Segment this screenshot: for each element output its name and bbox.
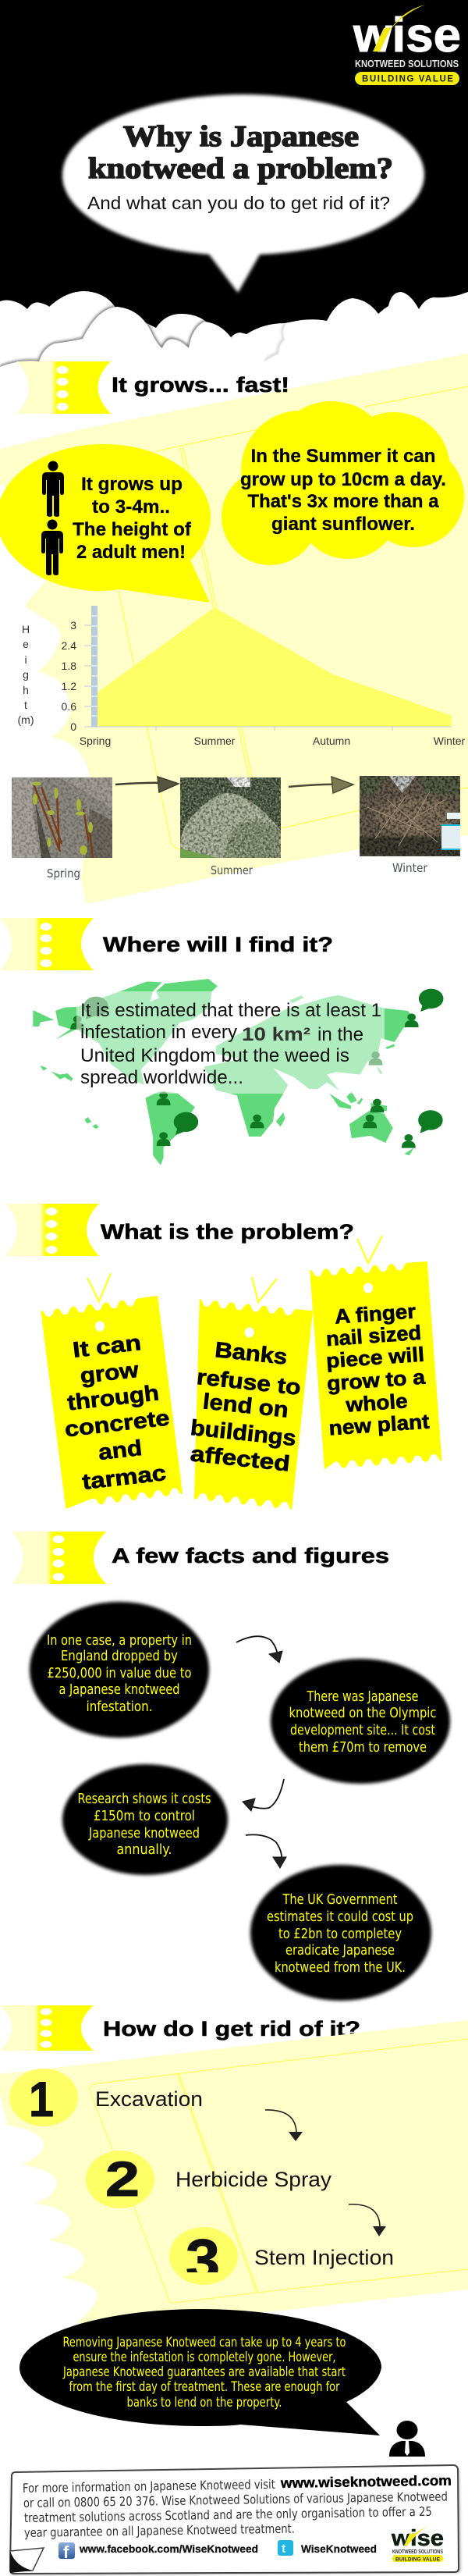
fact: property value: infestation. [86,1699,153,1715]
arrow: fact three to four [246,1834,286,1868]
fact: property value: England dropped by [61,1649,178,1664]
fact: olympic site: knotweed on the Olympic [289,1706,437,1721]
step 2: herbicide spray [86,2151,332,2208]
title: knotweed a problem? [88,152,393,185]
callout: guarantees speech bubble: banks to lend on the property. [126,2395,282,2410]
folded corner [10,2548,44,2573]
tag: grows through concrete: grow [79,1357,140,1388]
fact: government estimate: to £2bn to completey [278,1927,402,1942]
step 3: stem injection: 3 [186,2227,220,2293]
chart: height through the seasons: 3 [70,619,76,632]
tag: finger nail sized piece [310,1236,441,1469]
icon: twitter: t [282,2542,286,2556]
callout: guarantees speech bubble: Japanese Knotweed guarantees are available that start [62,2364,346,2379]
axis title: Height (m): i [24,653,27,666]
callout: guarantees speech bubble: from the first day of treatment. These are enough for [69,2379,340,2394]
tag: banks refuse: buildings [190,1415,297,1450]
chart: height through the seasons: Winter [434,735,466,747]
callout: height bubble [0,444,211,603]
logo: wise knotweed solutions [353,5,461,85]
tag: grows through concrete: It can [72,1330,143,1362]
photo captions [47,861,428,881]
arrow: spring to summer [115,777,179,792]
world map [33,979,443,1165]
step 1: excavation [9,2069,203,2127]
logo: wise knotweed solutions: BUILDING VALUE [362,75,453,84]
footer logo [391,2523,444,2562]
callout: summer growth cloud: giant sunflower. [271,514,415,535]
pale yellow panel: removal steps [0,2020,468,2324]
tag: grows through concrete: and [97,1436,144,1464]
icon: businessman [389,2421,425,2457]
chart: height through the seasons: 0 [70,720,76,733]
pale yellow panel: growth [0,354,468,904]
facebook address: www.facebook.com/WiseKnotweed [79,2542,258,2555]
chart: height through the seasons: Spring [80,735,111,747]
step 1: excavation: Excavation [95,2087,203,2111]
fact: cost of control: £150m to control [94,1809,195,1824]
chart: height through the seasons: 2.4 [62,639,76,652]
tag: grows through concrete: through [66,1380,160,1415]
section ticket: A few facts and figures [12,1532,106,1584]
section ticket: How do I get rid of it [0,2005,94,2051]
arrow: fact two to three [243,1779,284,1811]
chart: height through the seasons: 0.6 [62,700,76,713]
fact: property value: £250,000 in value due to [47,1666,192,1681]
step 1: excavation: 1 [29,2073,54,2127]
fact: cost of control [62,1764,228,1875]
tag: grows through concrete [41,1273,183,1509]
footer logo: BUILDING VALUE [395,2557,441,2562]
icons: people on map [70,1013,419,1148]
fact: government estimate: estimates it could cost up [267,1909,413,1925]
logo: wise knotweed solutions: wise [353,9,461,62]
tag: banks refuse: affected [190,1441,291,1476]
tag: finger nail sized piece: nail sized [325,1321,422,1350]
fact: olympic site: development site... It cost [290,1723,435,1738]
heading: It grows... fast!: It grows... fast! [112,373,289,397]
text: infestation estimate: spread worldwide... [80,1067,243,1088]
text: infestation estimate: It is estimated that there is at least 1 [80,1000,381,1021]
title: Why is Japanese [123,120,359,153]
tag: finger nail sized piece: grow to a [326,1365,426,1395]
tag: finger nail sized piece: A finger [334,1299,417,1329]
text: infestation estimate [80,1000,381,1088]
fact: property value: In one case, a property in [47,1633,192,1649]
header black background [0,0,468,375]
arrow: step two to three [349,2204,386,2236]
tag: grows through concrete: concrete [63,1405,171,1442]
tag: finger nail sized piece: piece will [325,1343,425,1372]
icon: facebook: f [63,2542,69,2562]
footer logo: KNOTWEED SOLUTIONS [392,2549,443,2555]
section ticket: Where will I find it [0,918,94,970]
axis title: Height (m): t [24,699,27,711]
callout: guarantees speech bubble: ensure the infestation is completely gone. However, [73,2350,335,2364]
callout: height bubble: The height of [73,519,192,540]
chart: height through the seasons: 1.8 [62,660,76,672]
footer text: For more information on Japanese Knotweed visit [23,2477,275,2496]
logo: wise knotweed solutions: KNOTWEED SOLUTIONS [355,59,459,69]
twitter handle: WiseKnotweed [301,2542,377,2555]
heading: A few facts and figures: A few facts and figures [112,1544,389,1567]
footer text: year guarantee on all Japanese Knotweed treatment. [24,2521,295,2540]
callout: height bubble: It grows up [81,474,183,495]
callout: guarantees speech bubble [20,2309,381,2435]
tag: banks refuse: Banks [214,1337,289,1369]
callout: height bubble: to 3-4m.. [92,496,170,518]
step 3: stem injection [169,2227,394,2293]
tag: banks refuse [179,1277,313,1510]
fact: property value [30,1602,209,1738]
tag: banks refuse: lend on [202,1389,289,1422]
heading: How do I get rid of it?: How do I get rid of it? [103,2017,360,2041]
fact: olympic site: them £70m to remove [299,1740,427,1756]
section ticket: What is the problem [5,1204,99,1256]
photo: summer [180,777,281,858]
callout: summer growth cloud: That's 3x more than a [248,491,439,512]
fact: government estimate: The UK Government [282,1892,398,1908]
fact: cost of control: Japanese knotweed [88,1826,200,1841]
footer box [10,2465,461,2575]
footer text [23,2473,452,2540]
clouds divider [0,291,468,375]
tag: grows through concrete: tarmac [81,1461,167,1494]
fact: olympic site: There was Japanese [307,1689,418,1705]
icon: two adult men [41,461,64,575]
axis title: Height (m): (m) [17,713,34,726]
axis title: Height (m): h [23,684,29,696]
subtitle: And what can you do to get rid of it? [87,193,390,213]
map text overlay panel [76,991,385,1094]
title speech bubble [62,94,424,293]
fact: cost of control: annually. [117,1842,172,1858]
photo captions: Summer [211,863,254,877]
title [88,120,393,185]
heading: What is the problem?: What is the problem? [101,1220,354,1244]
axis title: Height (m): e [23,638,29,650]
photo: spring [12,777,112,858]
arrow: fact one to two [236,1636,282,1663]
axis title: Height (m): H [22,623,30,635]
fact: government estimate [250,1865,431,2001]
fact: olympic site [271,1659,450,1784]
step 2: herbicide spray: Herbicide Spray [176,2168,332,2191]
icons: chat bubbles on map [83,989,443,1135]
chart: height through the seasons: Summer [194,735,236,747]
text: infestation estimate: 10 km² [242,1024,310,1045]
text: infestation estimate: United Kingdom but the weed is [80,1045,349,1066]
fact: government estimate: knotweed from the UK. [275,1960,406,1976]
axis title: Height (m): g [23,668,29,681]
heading: Where will I find it?: Where will I find it? [103,933,333,956]
callout: height bubble: 2 adult men! [76,542,186,563]
axis title: Height (m) [17,623,34,726]
fact: government estimate: eradicate Japanese [285,1943,395,1959]
callout: summer growth cloud: grow up to 10cm a day. [240,469,446,490]
arrow: step one to two [265,2110,303,2141]
footer logo: wise [391,2526,444,2551]
photo captions: Winter [392,861,428,875]
icon: facebook [58,2542,75,2562]
callout: summer growth cloud: In the Summer it can [251,446,435,467]
chart: height through the seasons [17,606,466,747]
chart: height through the seasons: Autumn [313,735,350,747]
tag: banks refuse: refuse to [196,1364,302,1400]
fact: property value: a Japanese knotweed [59,1682,179,1698]
callout: summer growth cloud [222,401,464,565]
text: infestation estimate: in the [317,1024,363,1045]
fact: cost of control: Research shows it costs [78,1791,211,1807]
callout: guarantees speech bubble: Removing Japanese Knotweed can take up to 4 years to [62,2335,346,2350]
footer text: www.wiseknotweed.com [280,2473,452,2491]
step 2: herbicide spray: 2 [105,2152,140,2207]
text: infestation estimate: infestation in every [80,1022,237,1043]
photo captions: Spring [47,866,80,881]
tag: finger nail sized piece: whole [344,1389,408,1417]
chart: height through the seasons: 1.2 [62,680,76,692]
photo: winter [360,776,460,856]
step 3: stem injection: Stem Injection [254,2246,394,2269]
arrow: summer to winter [289,777,353,793]
section ticket: It grows fast [16,361,111,414]
icon: twitter [278,2540,293,2556]
tag: finger nail sized piece: new plant [328,1410,431,1439]
